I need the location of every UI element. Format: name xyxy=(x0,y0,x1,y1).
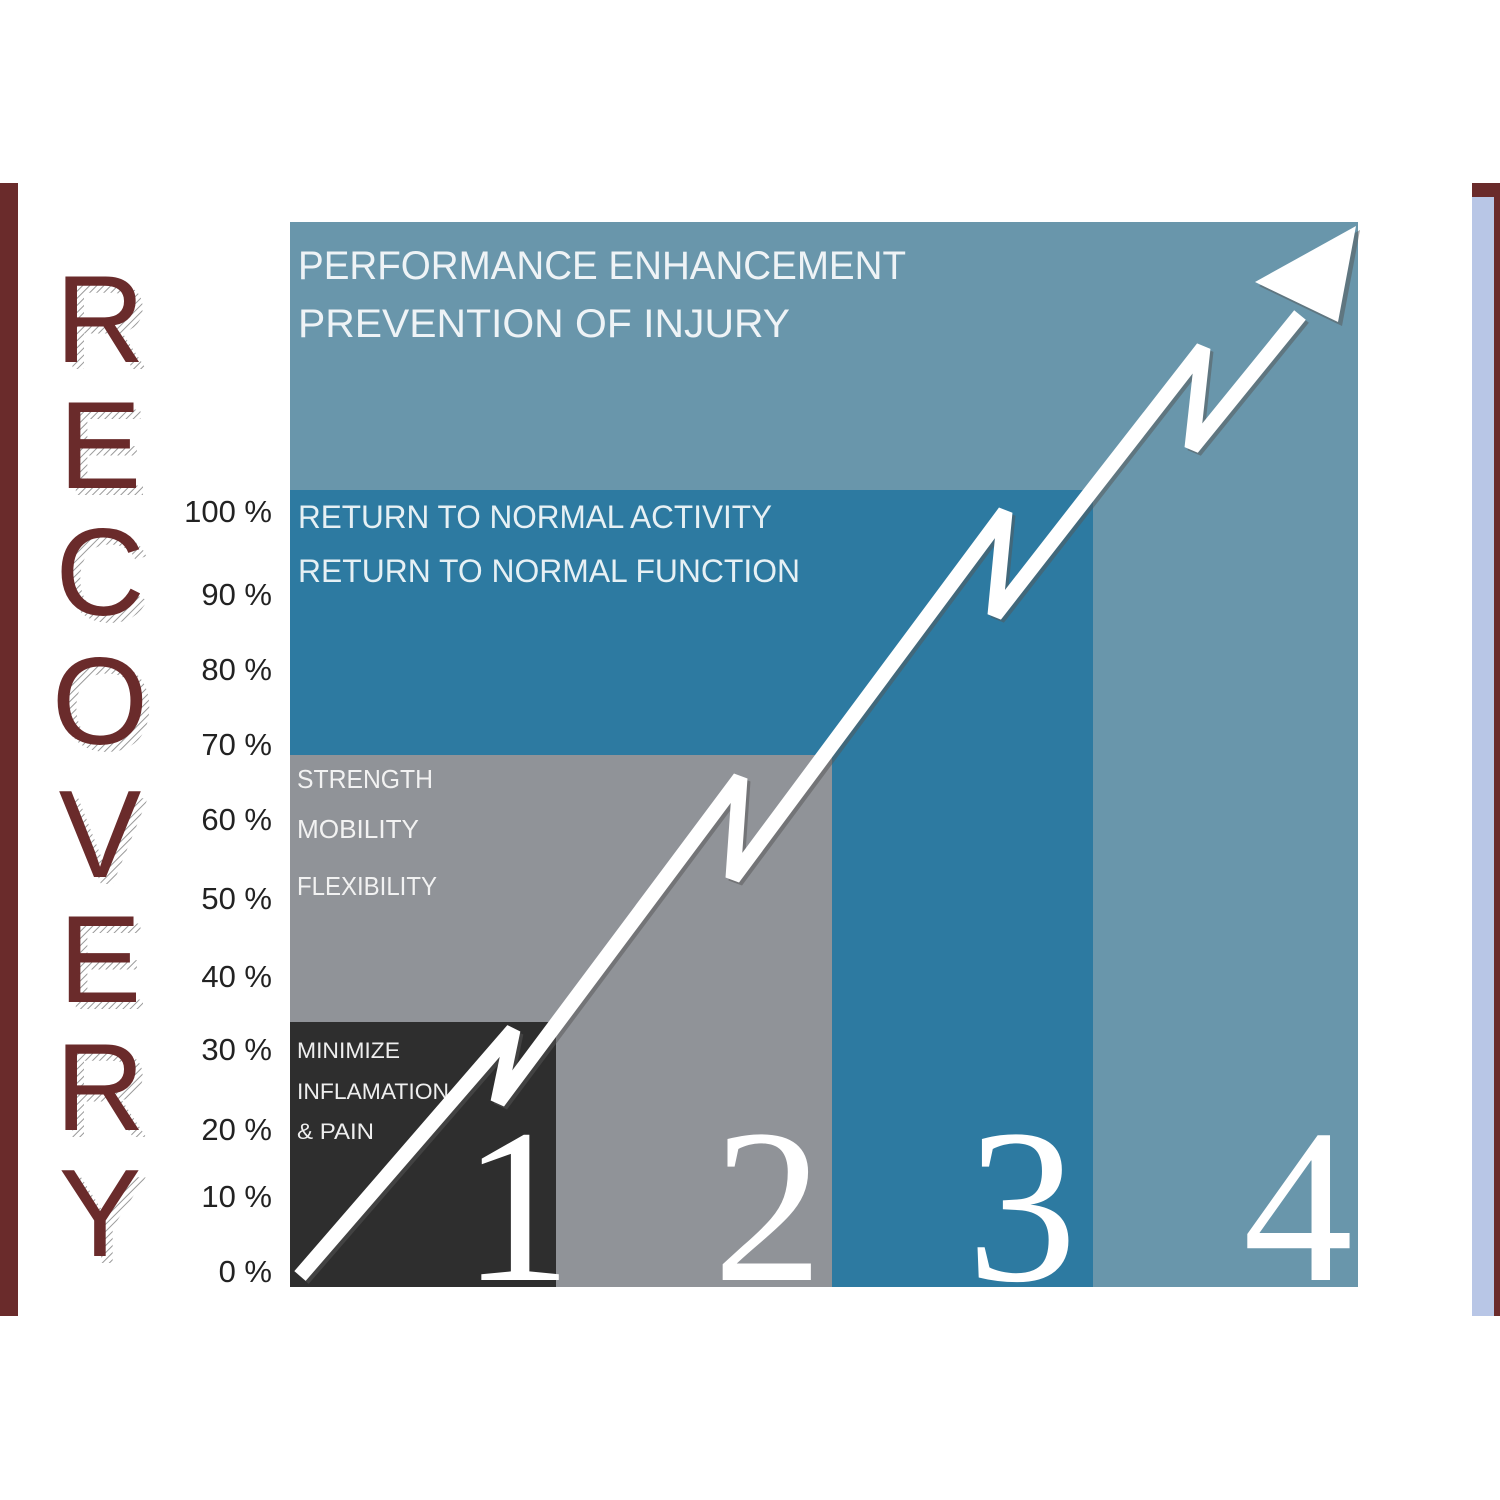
RECOVERY vertical title: Y xyxy=(59,1145,141,1283)
RECOVERY vertical title: O xyxy=(52,633,148,771)
percent axis labels xyxy=(184,494,272,1289)
percent axis labels: 50 % xyxy=(201,881,272,916)
stage numbers: 4 xyxy=(1243,1084,1353,1328)
panel: stage 4 performance xyxy=(290,222,1358,1287)
RECOVERY vertical title: E xyxy=(66,384,148,522)
RECOVERY vertical title: E xyxy=(59,377,141,515)
RECOVERY vertical title: C xyxy=(55,504,145,642)
stage numbers xyxy=(462,1084,1353,1328)
stage numbers: 2 xyxy=(713,1084,823,1328)
panel: stage 3 return to normal: RETURN TO NORMAL FUNCTION xyxy=(298,553,800,589)
percent axis labels: 30 % xyxy=(201,1032,272,1067)
RECOVERY vertical title: R xyxy=(62,258,152,396)
panel: stage 2 strength: STRENGTH xyxy=(297,764,433,794)
panel: stage 1 inflammation: & PAIN xyxy=(297,1119,374,1144)
panel: stage 1 inflammation: MINIMIZE xyxy=(297,1038,400,1063)
panel: stage 3 return to normal xyxy=(290,490,1093,1287)
percent axis labels: 40 % xyxy=(201,959,272,994)
RECOVERY vertical title: E xyxy=(59,891,141,1029)
RECOVERY vertical title: C xyxy=(62,511,152,649)
RECOVERY vertical title: R xyxy=(55,1019,145,1157)
right border bar xyxy=(1472,183,1500,1316)
panel: stage 4 performance: PERFORMANCE ENHANCEMENT xyxy=(298,244,906,288)
percent axis labels: 90 % xyxy=(201,577,272,612)
panel: stage 2 strength xyxy=(290,755,832,1287)
panel: stage 2 strength: FLEXIBILITY xyxy=(297,871,437,901)
percent axis labels: 80 % xyxy=(201,652,272,687)
RECOVERY vertical title: V xyxy=(59,766,142,904)
left border bar xyxy=(0,183,18,1316)
percent axis labels: 100 % xyxy=(184,494,272,529)
panel: stage 2 strength: MOBILITY xyxy=(297,814,419,844)
panel: stage 3 return to normal: RETURN TO NORMAL ACTIVITY xyxy=(298,499,772,535)
stage numbers: 3 xyxy=(967,1084,1077,1328)
panel: stage 1 inflammation: INFLAMATION xyxy=(297,1079,449,1104)
RECOVERY vertical title: V xyxy=(66,773,149,911)
percent axis labels: 70 % xyxy=(201,727,272,762)
percent axis labels: 10 % xyxy=(201,1179,272,1214)
panel: stage 1 inflammation xyxy=(290,1022,556,1287)
panel: stage 4 performance: PREVENTION OF INJURY xyxy=(298,302,790,346)
stage numbers: 1 xyxy=(462,1084,572,1328)
percent axis labels: 0 % xyxy=(219,1254,272,1289)
RECOVERY vertical title: O xyxy=(59,640,155,778)
percent axis labels: 60 % xyxy=(201,802,272,837)
percent axis labels: 20 % xyxy=(201,1112,272,1147)
RECOVERY vertical title: Y xyxy=(66,1152,148,1290)
RECOVERY vertical title: R xyxy=(62,1026,152,1164)
arrow: zigzag recovery line xyxy=(300,226,1360,1279)
RECOVERY vertical title xyxy=(52,251,155,1290)
RECOVERY vertical title: R xyxy=(55,251,145,389)
RECOVERY vertical title: E xyxy=(66,898,148,1036)
